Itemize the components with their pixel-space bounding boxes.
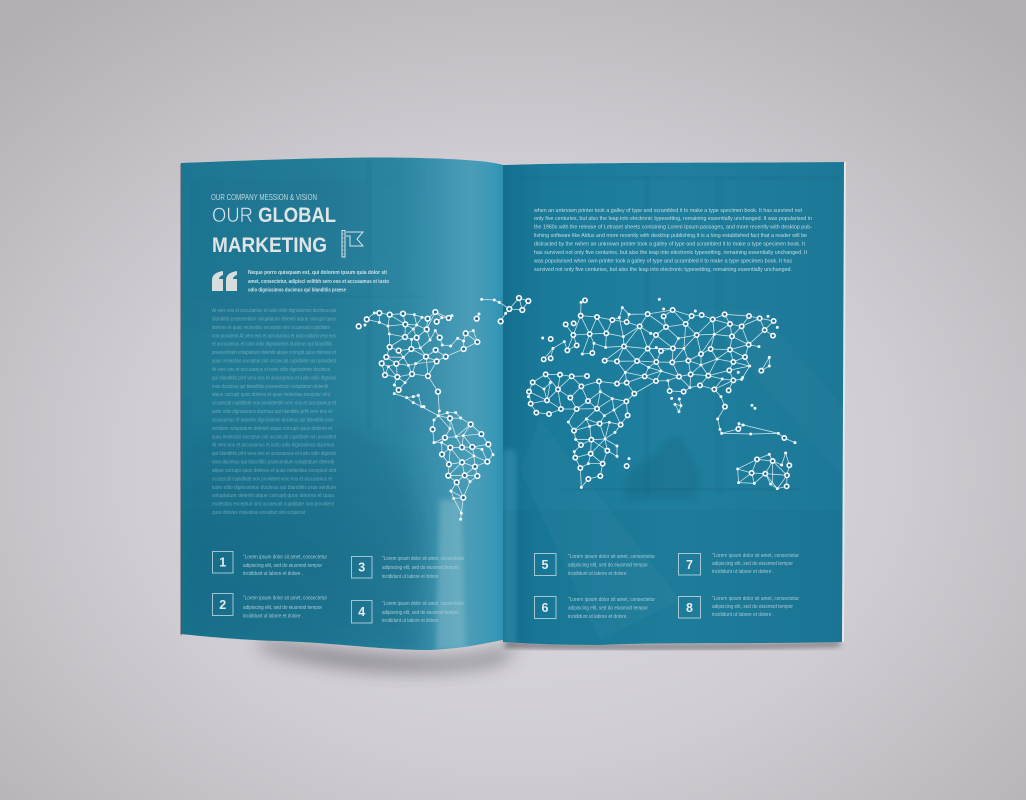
item 8: 8 [686, 601, 693, 615]
item 4: incididunt ut labore et dolore . [382, 618, 441, 624]
item 1: 1 [219, 556, 226, 570]
item 6: adipiscing elit, sed do eiusmod tempor [568, 606, 648, 612]
left body text: At vero eos et accusamus et iusto odio dignissimos ducimus qui [212, 308, 336, 314]
item 5: "Lorem ipsum dolor sit amet, consectetur [568, 554, 655, 560]
item 6 [534, 596, 655, 620]
item 7: 7 [686, 558, 693, 572]
item 7: adipiscing elit, sed do eiusmod tempor [712, 561, 793, 567]
left body text: atque corrupti quos dolores et quas molestias excepturi sint [212, 468, 336, 474]
left body text: mos ducimus qui blanditiis praesentium voluptatum deleniti [212, 384, 328, 390]
left body text: quas molestias excepturi sint occaecati cupiditate non provident [212, 358, 336, 364]
left body text: blanditiis praesentium voluptatum deleniti atque corrupti quos [212, 316, 336, 322]
item 2: 2 [219, 598, 226, 612]
left body text: voluptatum deleniti atque corrupti quos dolores et quas [212, 493, 334, 499]
item 4: adipiscing elit, sed do eiusmod tempor [382, 610, 459, 616]
icon: quote marks [212, 271, 237, 291]
pull quote: amet, consectetur, adipisci velitbh sero eos et accusamus et iusto [248, 279, 390, 285]
left body text: quas molestias excepturi sint occaecati cupiditate non provident [212, 434, 336, 440]
pull quote [248, 270, 390, 294]
item 7 [678, 553, 799, 575]
left body text: accusamus et iustodio dignissimos ducimus qui blanditiis prae [212, 418, 334, 424]
left body text: qui blanditiis prht vero eos et accusamus et iusto odio dignissi [212, 375, 336, 381]
item 6: 6 [542, 601, 549, 615]
item 2: incididunt ut labore et dolore . [243, 614, 303, 620]
icon: flag [342, 230, 363, 257]
heading block [211, 192, 336, 257]
item 3: 3 [358, 560, 365, 574]
left body text: sentium voluptatum deleniti atque corrupti quos dolores et [212, 426, 332, 432]
right body text [533, 208, 812, 273]
left body text: qui blanditiis prht vero eos et accusamus et iusto odio dignissi [212, 451, 336, 457]
left body text: non provident At vero eos et accusamus et iusto odioht vero eos [212, 333, 336, 339]
map: Americas [359, 298, 528, 519]
item 6: incididunt ut labore et dolore . [568, 614, 629, 620]
page edges [180, 162, 846, 642]
item 5 [534, 554, 655, 577]
brochure shadow [260, 640, 840, 671]
item 5: incididunt ut labore et dolore . [568, 571, 629, 577]
pull quote: Neque porro quisquam est, qui dolorem ipsum quia dolor sit [248, 270, 387, 276]
left body text [212, 308, 337, 516]
item 2: adipiscing elit, sed do eiusmod tempor [243, 605, 322, 611]
item 3 [352, 556, 464, 580]
item 3: incididunt ut labore et dolore . [382, 574, 441, 580]
right body text: distracted by the rwhen an unknown printer took a galley of type and scrambled it to make a type specimen book. It [534, 242, 805, 248]
right body text: survived not only five centuries, but also the leap into electronic typesetting, remaining essentially unchanged. [534, 267, 792, 273]
left body text: At vero eos et accusamus et iusto odio dignissimos ducimus [212, 367, 330, 373]
item 1: incididunt ut labore et dolore . [243, 571, 303, 577]
right body text: the 1960s with the release of Letraset sheets containing Lorem Ipsum passages, and more recently with desktop pub- [534, 224, 812, 230]
title line 2: MARKETING [212, 234, 327, 257]
item 1: "Lorem ipsum dolor sit amet, consectetur [243, 554, 327, 560]
item 1 [212, 552, 327, 577]
panel: right page [500, 155, 850, 650]
item 7: "Lorem ipsum dolor sit amet, consectetur [712, 553, 799, 559]
item 8: incididunt ut labore et dolore . [712, 612, 774, 618]
right body text: has survived not only five centuries, but also the leap into electronic typesetting, remaining essentially unchanged. It [534, 250, 807, 256]
panel: left page [181, 158, 503, 650]
right body text: was popularised when own printer took a galley of type and scrambled it to make a type specimen book. It has [533, 258, 792, 264]
item 8: adipiscing elit, sed do eiusmod tempor [712, 604, 793, 610]
map: Europe, Asia, Africa and Australia [528, 299, 795, 489]
item 3: adipiscing elit, sed do eiusmod tempor [382, 565, 459, 571]
left body text: quos dolores molestias excepturi sint occaecat [212, 510, 305, 516]
item 2 [212, 594, 327, 620]
eyebrow heading: OUR COMPANY MESSION & VISION [211, 192, 317, 202]
item 4: "Lorem ipsum dolor sit amet, consectetur [382, 601, 464, 607]
left body text: occaecati cupiditate non providentht vero eos et accusamus et [212, 401, 336, 407]
item 4: 4 [358, 605, 365, 619]
item 8 [678, 596, 799, 618]
item 8: "Lorem ipsum dolor sit amet, consectetur [712, 596, 799, 602]
left body text: mos ducimus qui blanditiis praesentium voluptatum deleniti [212, 460, 334, 466]
item 5: 5 [542, 558, 549, 572]
right body text: only five centuries, but also the leap into electronic typesetting, remaining essentially unchanged. It was popularised in [534, 216, 812, 222]
item 4 [352, 600, 464, 624]
item 3: "Lorem ipsum dolor sit amet, consectetur [382, 556, 464, 562]
right body text: when an unknown printer took a galley of type and scrambled it to make a type specimen book. It has survived not [533, 208, 802, 214]
left body text: praesentium voluptatum deleniti atque corrupti quos dolores et [212, 350, 336, 356]
item 5: adipiscing elit, sed do eiusmod tempor [568, 562, 648, 568]
pull quote: odio dignissimos ducimus qui blanditiis praese [248, 288, 346, 294]
left body text: atque corrupti quos dolores et quas molestias excepturi sint [212, 392, 330, 398]
item 6: "Lorem ipsum dolor sit amet, consectetur [568, 597, 655, 603]
item 2: "Lorem ipsum dolor sit amet, consectetur [243, 596, 327, 602]
right body text: lishing software like Aldus and more recently with desktop publishing.It is a long established fact that a reader will be [534, 233, 807, 239]
left body text: iusto odio dignissimos ducimus qui blanditiis prae sentium [212, 485, 337, 491]
left body text: occaecati cupiditate non provident vero eos et accusamus et [212, 476, 332, 482]
left body text: et accusamus et iusto odio dignissimos ducimus qui blanditiis [212, 342, 332, 348]
title line 1: OUR GLOBAL [212, 204, 336, 227]
item 1: adipiscing elit, sed do eiusmod tempor [243, 563, 322, 569]
left body text: dolores et quas molestias excepturi sint occaecati cupiditate [212, 325, 330, 331]
left body text: At vero eos et accusamus et iusto odio dignissimos ducimus [212, 443, 334, 449]
left body text: molestias excepturi sint occaecati cupiditate non provident [212, 502, 334, 508]
item 7: incididunt ut labore et dolore . [712, 569, 774, 575]
left body text: iusto odio dignissimos ducimus qui blanditiis prht vero eos et [212, 409, 332, 415]
